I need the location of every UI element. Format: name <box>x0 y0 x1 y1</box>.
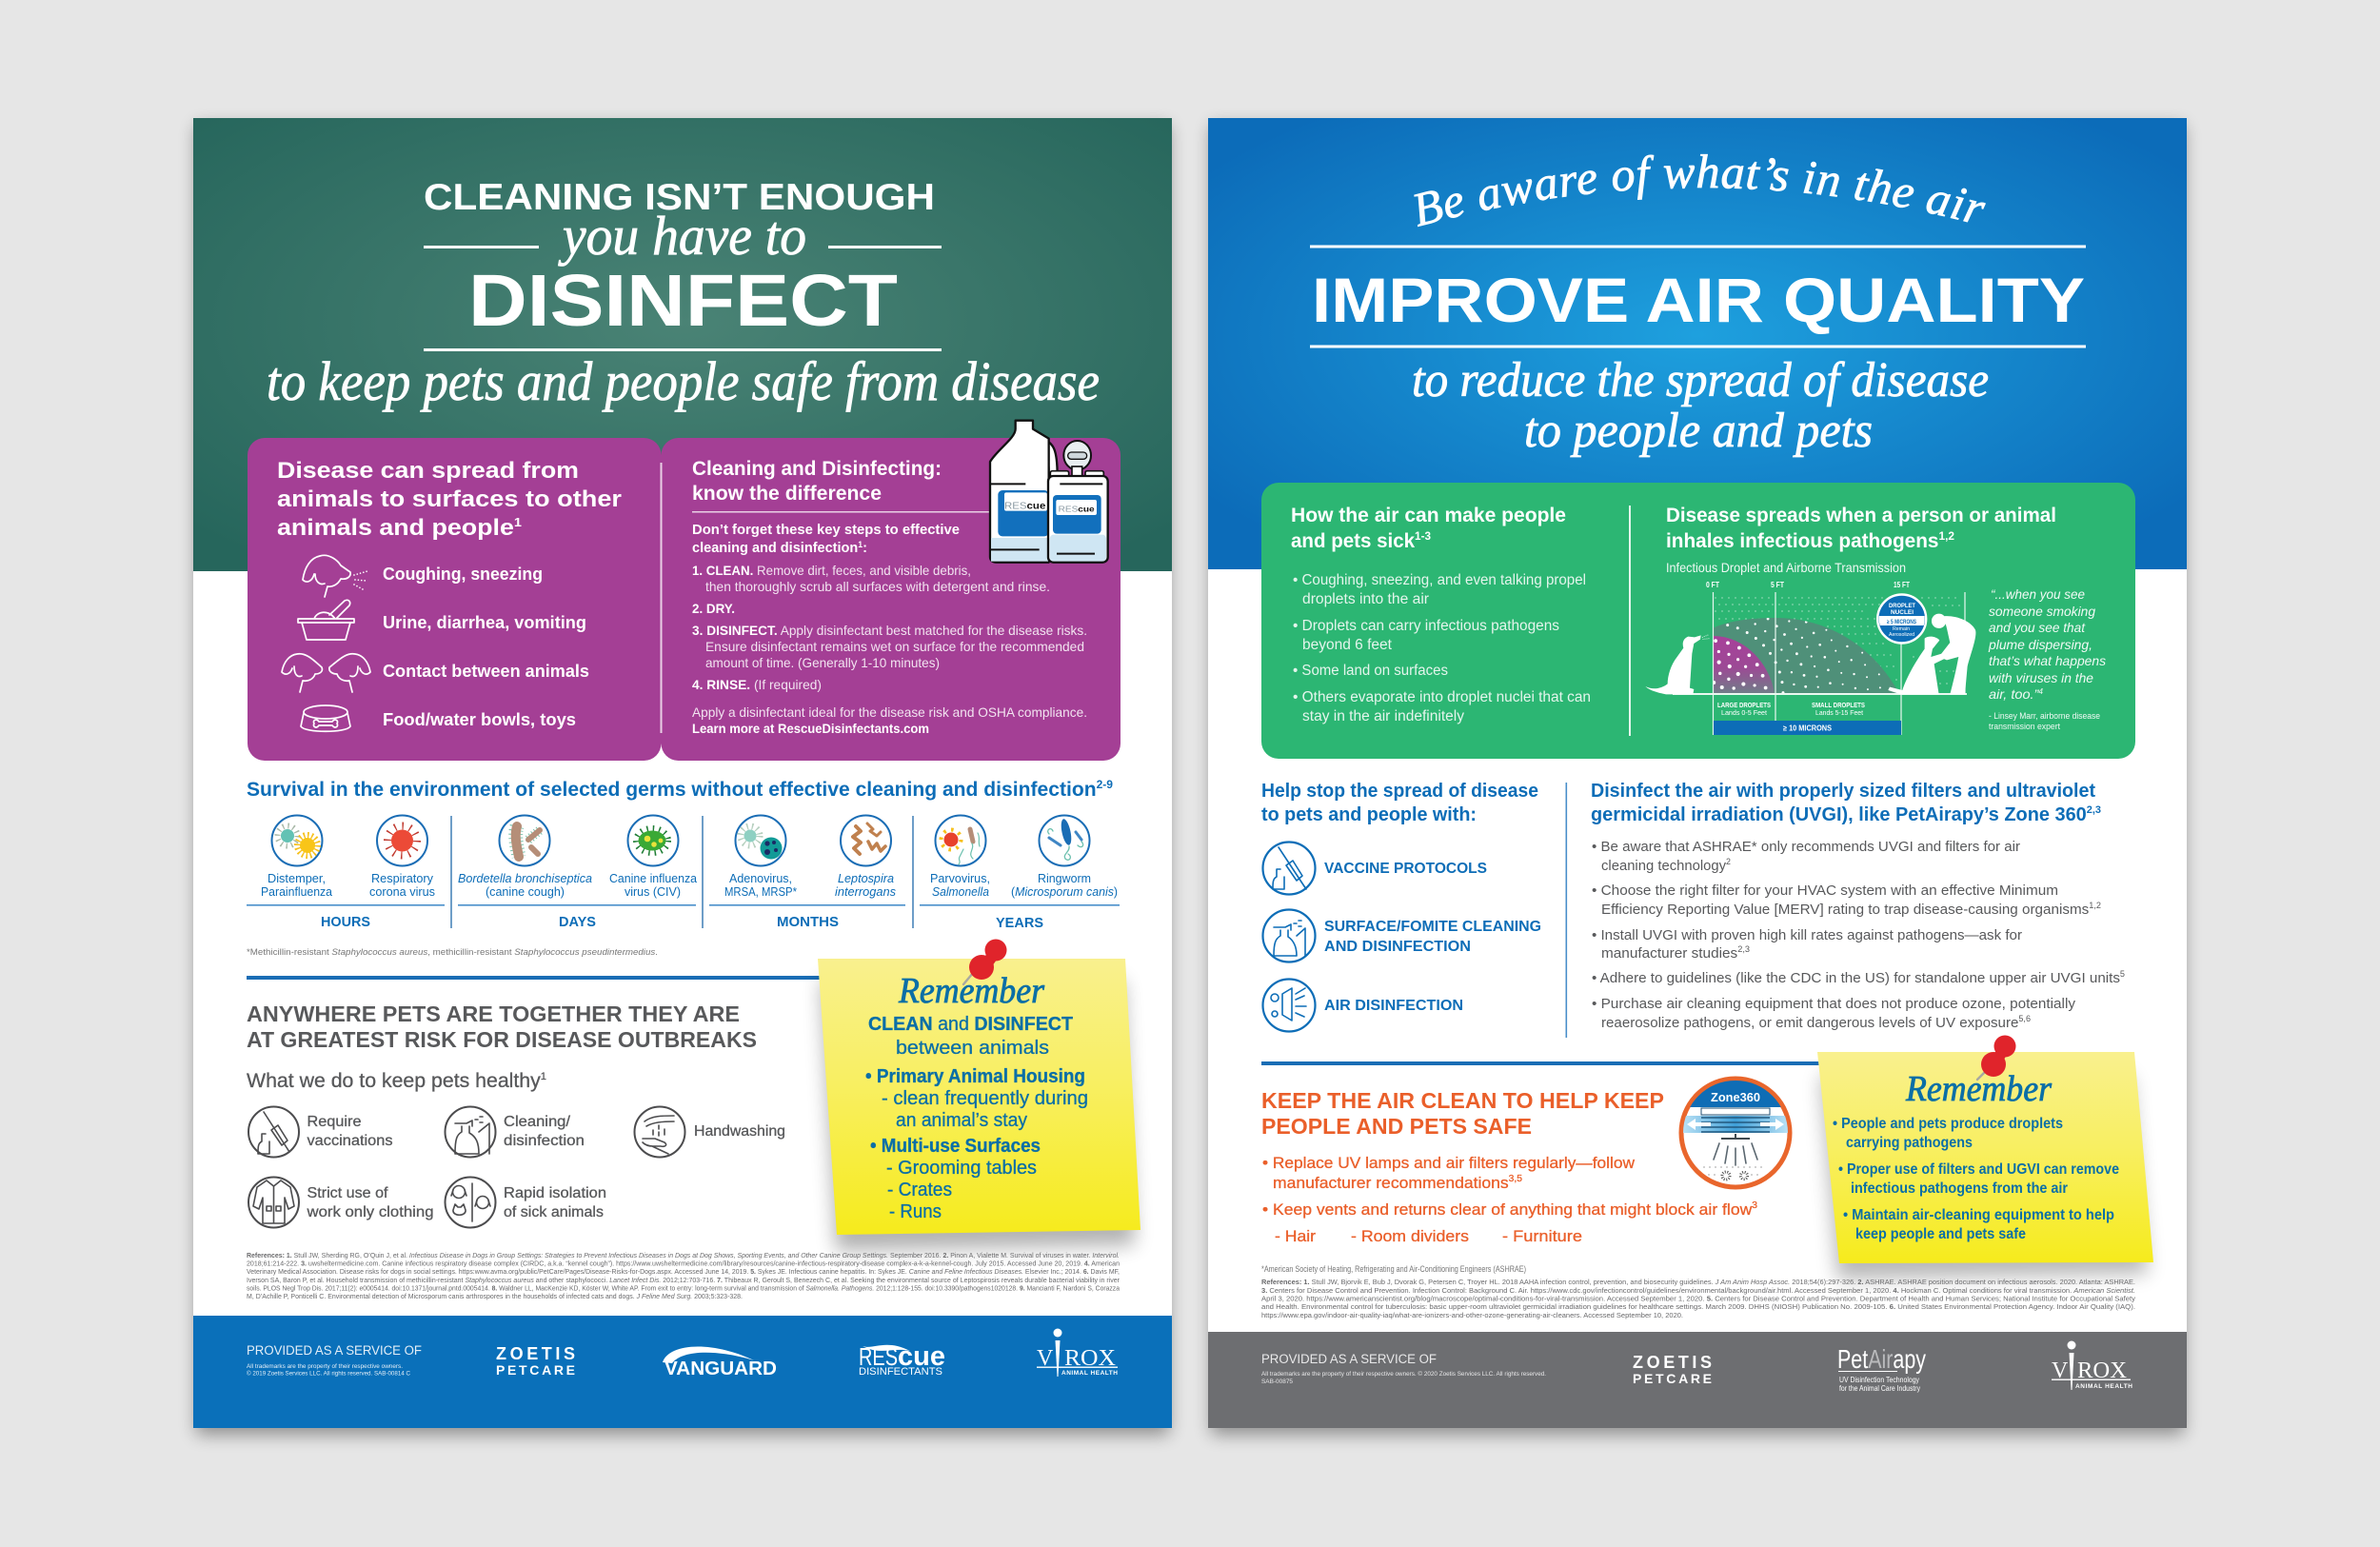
disinfect bullet list: 1,2 <box>2089 901 2101 910</box>
text: cleaning: Cleaning/ <box>504 1114 571 1130</box>
practices list <box>248 1106 785 1228</box>
labels: years germs <box>930 872 1118 899</box>
note text: • Maintain air-cleaning equipment to help <box>1843 1207 2114 1223</box>
disinfect bullet list: • Be aware that ASHRAE* only recommends UVGI and filters for air <box>1592 839 2020 855</box>
provided as a service: PROVIDED AS A SERVICE OF <box>1261 1352 1437 1366</box>
droplet size labels: Lands 5-15 Feet <box>1815 708 1864 717</box>
subheading: what we do: What we do to keep pets healthy <box>247 1070 537 1092</box>
droplet size labels: SMALL DROPLETS <box>1812 701 1865 709</box>
icon: ringworm <box>1040 815 1089 866</box>
references <box>1261 1278 2135 1319</box>
labels: hours germs: corona virus <box>369 885 435 899</box>
poster shadows <box>196 126 2184 1435</box>
text: isolation <box>504 1185 606 1220</box>
icon: adenovirus mrsa <box>735 815 786 866</box>
title <box>1310 154 2086 458</box>
logo: rescue: RES <box>859 1342 898 1371</box>
note text: carrying pathogens <box>1846 1135 1973 1151</box>
steps list <box>692 563 1087 736</box>
steps list: 3. DISINFECT. Apply disinfectant best matched for the disease risks. <box>692 623 1087 638</box>
micron bar: ≥ 10 MICRONS <box>1783 724 1833 733</box>
quote: that’s what happens <box>1989 653 2106 668</box>
text: coughing: Coughing, sneezing <box>383 565 543 584</box>
heading: survival in the environment: Survival in the environment of selected germs without effective cleaning and disinfection <box>247 779 1093 801</box>
icon: cleaning <box>446 1106 495 1158</box>
disinfect bullet list: reaerosolize pathogens, or emit dangerous levels of UV exposure <box>1601 1015 2015 1031</box>
divider rule <box>1261 1061 1828 1065</box>
text: vaccinations: Require <box>307 1114 362 1130</box>
years group <box>920 815 1120 931</box>
steps list: amount of time. (Generally 1-10 minutes) <box>705 655 940 670</box>
note text: infectious pathogens from the air <box>1851 1180 2068 1197</box>
text: isolation: of sick animals <box>504 1204 604 1220</box>
logo: virox <box>2052 1340 2132 1390</box>
steps list: Apply a disinfectant ideal for the disease risk and OSHA compliance. <box>692 704 1087 720</box>
quote: with viruses in the <box>1989 670 2093 685</box>
icon: two dogs <box>282 654 370 692</box>
panel heading: and pets sick <box>1291 530 1418 552</box>
labels: hours germs: Respiratory <box>371 872 434 885</box>
provided as a service: PROVIDED AS A SERVICE OF <box>247 1343 422 1358</box>
icon: coughing dog <box>303 555 367 597</box>
disinfect bullet list: 5,6 <box>2018 1014 2031 1023</box>
icon: isolation <box>446 1177 495 1228</box>
provided as a service <box>1261 1352 1546 1385</box>
bullet list: • Coughing, sneezing, and even talking propel <box>1293 572 1586 588</box>
text: surface: AND DISINFECTION <box>1324 939 1471 955</box>
labels: years germs: Parvovirus, <box>930 872 990 885</box>
title: DISINFECT <box>468 260 898 342</box>
heading: disease spreads <box>1666 505 2056 552</box>
title: you have to <box>558 205 806 267</box>
group dividers <box>451 816 913 928</box>
orange bullet list: - Room dividers <box>1351 1227 1469 1245</box>
icon: respiratory corona virus <box>377 815 427 866</box>
logo: zoetis <box>496 1344 575 1378</box>
steps list: 4. RINSE. (If required) <box>692 677 822 692</box>
quote: someone smoking <box>1989 604 2095 619</box>
bullet list: beyond 6 feet <box>1302 637 1393 653</box>
steps list: 2. DRY. <box>692 601 735 616</box>
steps intro: Don’t forget these key steps to effective <box>692 522 960 538</box>
title: Be aware of what’s in the air <box>1414 154 1986 227</box>
text: handwashing: Handwashing <box>694 1123 785 1140</box>
badge: droplet nuclei: DROPLET <box>1889 603 1915 609</box>
heading: survival in the environment: 2-9 <box>1097 778 1113 791</box>
orange bullet list: - Furniture <box>1502 1227 1582 1245</box>
logo: vanguard <box>663 1347 777 1379</box>
label: hours: HOURS <box>321 914 370 930</box>
heading: disinfect the air: Disinfect the air with properly sized filters and ultraviolet <box>1591 781 2095 802</box>
steps intro: : <box>863 540 867 556</box>
panel heading <box>692 458 990 512</box>
divider rule <box>247 976 827 980</box>
logo: zoetis: ZOETIS <box>496 1344 575 1363</box>
title <box>267 177 1100 412</box>
orange bullet list: manufacturer recommendations <box>1273 1174 1501 1192</box>
provided as a service: All trademarks are the property of their respective owners. © 2020 Zoetis Services LLC. All rights reserved. <box>1261 1370 1546 1378</box>
note text: - clean frequently during <box>882 1088 1088 1109</box>
logo: zoetis: PETCARE <box>1633 1371 1712 1386</box>
provided as a service <box>247 1343 422 1377</box>
heading: disease spreads: inhales infectious pathogens <box>1666 530 1941 552</box>
orange bullet list <box>1262 1154 1757 1245</box>
logo: vanguard: VANGUARD <box>664 1359 777 1379</box>
icon: bordetella <box>499 815 550 866</box>
panel heading: How the air can make people <box>1291 505 1566 526</box>
subheading: transmission: Infectious Droplet and Airborne Transmission <box>1666 560 1906 575</box>
droplet size labels: Lands 0-5 Feet <box>1721 708 1768 717</box>
text: food: Food/water bowls, toys <box>383 710 576 729</box>
badge: droplet nuclei: Aerosolized <box>1889 632 1914 638</box>
droplet size labels <box>1717 701 1865 717</box>
text: vaccinations: vaccinations <box>307 1133 393 1149</box>
title: CLEANING ISN’T ENOUGH <box>424 177 935 218</box>
logo: zoetis: PETCARE <box>496 1362 575 1378</box>
labels: months germs: Adenovirus, <box>729 872 792 885</box>
provided as a service: All trademarks are the property of their respective owners. <box>247 1363 403 1370</box>
note text: CLEAN and DISINFECT <box>868 1014 1073 1035</box>
logo: rescue <box>859 1341 945 1378</box>
note text: • Multi-use Surfaces <box>870 1136 1041 1157</box>
icon: bowl and bone <box>301 705 350 731</box>
icon: vaccine <box>1262 842 1316 895</box>
logo: rescue: DISINFECTANTS <box>859 1366 942 1378</box>
quote: transmission expert <box>1989 722 2060 732</box>
labels: months germs: MRSA, MRSP* <box>724 885 797 899</box>
icon: zone360 unit <box>1680 1076 1791 1187</box>
heading: keep the air clean: KEEP THE AIR CLEAN TO HELP KEEP <box>1261 1088 1664 1113</box>
disinfect bullet list: • Adhere to guidelines (like the CDC in the US) for standalone upper air UVGI units <box>1592 970 2114 986</box>
panel: cleaning and disinfecting <box>661 421 1121 761</box>
disinfect bullet list: 2,3 <box>1737 944 1750 954</box>
quote: plume dispersing, <box>1988 637 2092 652</box>
script: remember: Remember <box>898 971 1044 1011</box>
panel heading: Disease can spread from <box>277 458 579 484</box>
heading: anywhere pets are together: AT GREATEST RISK FOR DISEASE OUTBREAKS <box>247 1027 757 1052</box>
disinfect bullet list: cleaning technology <box>1601 858 1728 874</box>
badge: droplet nuclei: ≥ 5 MICRONS <box>1887 620 1916 625</box>
title: to reduce the spread of disease <box>1412 353 1989 407</box>
logo: virox: ROX <box>2077 1359 2127 1383</box>
panel heading: know the difference <box>692 483 882 505</box>
labels: days germs: Bordetella bronchiseptica <box>458 872 592 885</box>
heading: disinfect the air: germicidal irradiation (UVGI), like PetAirapy’s Zone 360 <box>1591 804 2089 825</box>
note text: between animals <box>896 1038 1049 1059</box>
logo: zoetis <box>1633 1353 1712 1386</box>
chart: droplet transmission <box>1645 582 1976 735</box>
poster: disinfect <box>193 118 1172 1428</box>
orange bullet list: 3,5 <box>1509 1174 1522 1184</box>
header background <box>193 118 1172 571</box>
references <box>247 1251 1121 1300</box>
labels: days germs: (canine cough) <box>486 885 565 899</box>
logo: zoetis: ZOETIS <box>1633 1353 1712 1372</box>
steps list: Ensure disinfectant remains wet on surface for the recommended <box>705 639 1084 654</box>
quote <box>1988 586 2106 732</box>
logo: petairapy <box>1837 1344 1926 1393</box>
disinfect bullet list: • Purchase air cleaning equipment that does not produce ozone, potentially <box>1592 996 2076 1012</box>
text: clothing <box>306 1185 434 1220</box>
labels: days germs <box>458 872 697 899</box>
panel heading <box>1291 505 1566 552</box>
germ survival chart <box>247 815 1120 931</box>
quote: 4 <box>2038 687 2044 696</box>
logo: virox: ROX <box>1064 1346 1116 1371</box>
badge: droplet nuclei: Remain <box>1893 626 1910 632</box>
vertical rule <box>1565 783 1567 1038</box>
text: air: AIR DISINFECTION <box>1324 998 1463 1014</box>
references: 3. Centers for Disease Control and Prevention. Infection Control: Background C. Air. https://www.cdc.gov/infectioncontrol/guidelines/environmental/background/air.html. Accessed September 1, 2020. 4. Hockman C. Optimal conditions for viral transmission. American Scientist. <box>1261 1286 2135 1295</box>
icon: rescue bottles: REScue <box>1059 504 1095 513</box>
labels: hours germs <box>261 872 435 899</box>
note text: • Primary Animal Housing <box>865 1066 1085 1087</box>
hours group <box>247 815 445 930</box>
heading: keep the air clean: PEOPLE AND PETS SAFE <box>1261 1114 1532 1139</box>
bullet list: droplets into the air <box>1302 591 1429 607</box>
heading: disinfect the air: 2,3 <box>2087 804 2101 816</box>
logo: virox: V <box>2052 1359 2069 1383</box>
months group <box>709 815 905 930</box>
steps intro <box>692 522 960 556</box>
title: to keep pets and people safe from disease <box>267 350 1100 412</box>
silhouette: person and dog <box>1888 614 1975 694</box>
bullet list: • Others evaporate into droplet nuclei that can <box>1293 689 1591 705</box>
labels: days germs: Canine influenza <box>609 872 697 885</box>
orange bullet list: • Replace UV lamps and air filters regularly—follow <box>1262 1154 1636 1172</box>
droplet size labels: LARGE DROPLETS <box>1717 701 1771 709</box>
panel heading <box>277 458 622 541</box>
panel heading: 1-3 <box>1415 529 1431 543</box>
labels: years germs: (Microsporum canis) <box>1011 885 1118 899</box>
text: cleaning: disinfection <box>504 1133 585 1149</box>
disinfect bullet list: • Install UVGI with proven high kill rates against pathogens—ask for <box>1592 927 2022 943</box>
quote: air, too.” <box>1989 686 2037 702</box>
logo: virox <box>1037 1329 1118 1377</box>
icon: rescue bottles <box>990 421 1108 563</box>
text: contact: Contact between animals <box>383 662 589 681</box>
label: months: MONTHS <box>777 914 839 930</box>
badge: droplet nuclei: NUCLEI <box>1891 609 1914 616</box>
heading: anywhere pets are together: ANYWHERE PETS ARE TOGETHER THEY ARE <box>247 1002 740 1026</box>
bullet list: • Some land on surfaces <box>1293 663 1448 679</box>
provided as a service: © 2019 Zoetis Services LLC. All rights reserved. SAB-00814 C <box>247 1369 410 1377</box>
footer: grey sponsors <box>1208 1332 2187 1428</box>
note text: keep people and pets safe <box>1855 1226 2026 1242</box>
panel: how disease spreads <box>248 438 661 761</box>
icon: vaccinations <box>248 1106 299 1158</box>
heading: disease spreads: Disease spreads when a person or animal <box>1666 505 2056 526</box>
labels: years germs: Salmonella <box>932 885 989 899</box>
labels: months germs <box>724 872 896 899</box>
text: vaccinations <box>307 1114 393 1149</box>
icon: air disinfection <box>1262 979 1316 1032</box>
references: References: 1. Stull JW, Bjorvik E, Bub J, Dvorak G, Petersen C, Troyer HL. 2018 AAHA infection control, prevention, and biosecurity guidelines. J Am Anim Hosp Assoc. 2018;54(6):297-326. 2. ASHRAE. ASHRAE position document on infectious aerosols. 2020. Atlanta: ASHRAE. <box>1261 1278 2135 1286</box>
icon: leptospira <box>841 815 891 866</box>
plume: large droplets <box>1713 636 1775 694</box>
note text: - Runs <box>889 1201 942 1222</box>
disinfect bullet list: manufacturer studies <box>1601 945 1735 962</box>
steps intro: cleaning and disinfection <box>692 540 863 556</box>
icon: litter tub <box>298 600 354 640</box>
references: https://www.epa.gov/indoor-air-quality-iaq/what-are-ionizers-and-other-ozone-generating-air-cleaners. Accessed September 10, 2020. <box>1261 1311 1683 1319</box>
panel heading: animals to surfaces to other <box>277 486 622 512</box>
steps list: Learn more at RescueDisinfectants.com <box>692 721 929 736</box>
distance labels: 0 FT <box>1706 581 1719 589</box>
icon: distemper <box>272 815 322 866</box>
panel: how air makes people sick <box>1261 483 2135 759</box>
quote: and you see that <box>1989 620 2086 635</box>
logo: virox: V <box>1037 1346 1054 1371</box>
quote: “...when you see <box>1991 586 2085 602</box>
disinfect bullet list: 5 <box>2120 969 2125 979</box>
icon: canine influenza <box>628 815 678 866</box>
micron bar <box>1714 721 1901 735</box>
references: Veterinary Medical Association. Disease risks for dogs in social settings. https:www.avma.org/public/PetCare/Pages/Disease-Risks-for-Dogs.aspx. Accessed June 14, 2019. 5. Sykes JE. Infectious canine hepatitis. In: Sykes JE. Canine and Feline Infectious Diseases. Elsevier Inc.; 2014. 6. Davis MF, <box>247 1267 1120 1276</box>
note text: • Proper use of filters and UGVI can remove <box>1838 1161 2119 1178</box>
text: vaccine: VACCINE PROTOCOLS <box>1324 861 1487 877</box>
references: 2018;61:214-222. 3. uwsheltermedicine.com. Canine infectious respiratory disease complex (CIRDC, a.k.a. “kennel cough”). https://www.uwsheltermedicine.com/library/resources/canine-infectious-respiratory-disease complex-a-k-a-kennel-cough. July 2015. Accessed June 20, 2019. 4. American <box>247 1259 1120 1268</box>
icon: rescue bottles: REScue <box>1004 502 1046 512</box>
subheading: what we do: 1 <box>541 1071 546 1082</box>
references: and Health. Environmental control for tuberculosis: basic upper-room ultraviolet germicidal irradiation guidelines for healthcare settings. March 2009. DHHS (NIOSH) Publication No. 2009-105. 6. United States Environmental Protection Agency. Indoor Air Quality (IAQ). <box>1261 1302 2135 1311</box>
panel heading: animals and people <box>277 515 489 541</box>
sticky note: remember <box>1817 1036 2153 1279</box>
disinfect bullet list: Efficiency Reporting Value [MERV] rating to trap disease-causing organisms <box>1601 902 2081 918</box>
icon: red pin <box>963 939 1007 984</box>
labels: hours germs: Parainfluenza <box>261 885 332 899</box>
disinfect bullet list: • Choose the right filter for your HVAC system with an effective Minimum <box>1592 883 2058 899</box>
labels: months germs: Leptospira <box>838 872 894 885</box>
title: IMPROVE AIR QUALITY <box>1312 265 2085 335</box>
distance labels: 15 FT <box>1894 581 1910 589</box>
note text: - Crates <box>887 1180 952 1200</box>
text: clothing: work only clothing <box>306 1204 434 1220</box>
note text <box>865 1014 1088 1222</box>
distance labels <box>1706 581 1910 589</box>
plume: small droplets <box>1713 618 1899 694</box>
sticky note: remember <box>818 939 1140 1251</box>
distance labels: 5 FT <box>1771 581 1784 589</box>
orange bullet list: - Hair <box>1275 1227 1316 1245</box>
script: remember: Remember <box>1905 1069 2052 1109</box>
silhouette: coughing dog <box>1645 635 1710 694</box>
footer: blue sponsors <box>193 1316 1172 1428</box>
footnote: methicillin: *Methicillin-resistant Staphylococcus aureus , methicillin-resistant Staphylococcus pseudintermedius . <box>247 947 658 958</box>
title: to people and pets <box>1524 404 1873 458</box>
references: M, D’Achille P, Ponticelli C. Environmental detection of Microsporum canis arthrospores in the households of infected cats and dogs. J Feline Med Surg. 2003;5:323-328. <box>247 1292 743 1300</box>
text: isolation: Rapid isolation <box>504 1185 606 1201</box>
note text: • People and pets produce droplets <box>1833 1116 2063 1132</box>
steps list: 1. CLEAN. Remove dirt, feces, and visible debris, <box>692 563 971 578</box>
logo: rescue: cue <box>898 1341 945 1372</box>
label: days: DAYS <box>559 914 596 930</box>
references: soils. PLOS Negl Trop Dis. 2017;11(2): e0005414. doi:10.1371/journal.pntd.0005414. 8. Waldner LL, MacKenzie KD, Köster W, White AP. From exit to entry: long-term survival and transmission of Salmonella. Pathogens. 2012;1:128-155. doi:10.3390/pathogens1020128. 9. Mancianti F, Nardoni S, Corazza <box>247 1283 1121 1293</box>
text: cleaning <box>504 1114 585 1149</box>
heading: help stop the spread: to pets and people with: <box>1261 804 1477 825</box>
bullet list: stay in the air indefinitely <box>1302 708 1464 724</box>
labels: hours germs: Distemper, <box>268 872 326 885</box>
references: Iverson SA, Baron P, et al. Household transmission of methicillin-resistant Staphylococcus aureus and other staphylococci. Lancet Infect Dis. 2012;12:703-716. 7. Thibeaux R, Geroult S, Benezech C, et al. Seeking the environmental source of Leptospirosis reveals durable bacterial viability in river <box>247 1276 1120 1284</box>
logo: petairapy: UV Disinfection Technology <box>1839 1375 1920 1384</box>
icon: red pin <box>1977 1036 2016 1080</box>
poster: air quality <box>1208 118 2187 1428</box>
footnote: ashrae: *American Society of Heating, Refrigerating and Air-Conditioning Engineers (ASHRAE) <box>1261 1264 1526 1275</box>
label: years: YEARS <box>996 915 1043 931</box>
orange bullet list: 3 <box>1752 1200 1757 1211</box>
orange bullet list: • Keep vents and returns clear of anything that might block air flow <box>1262 1200 1736 1219</box>
icon: zone360 unit: Zone360 <box>1711 1090 1760 1104</box>
distance axes <box>1714 592 1965 735</box>
bullet list <box>1293 572 1591 724</box>
heading: disease spreads: 1,2 <box>1938 529 1954 543</box>
logo: petairapy: PetAirapy <box>1837 1344 1926 1374</box>
note text: - Grooming tables <box>886 1158 1037 1179</box>
icon: work clothing <box>248 1177 299 1228</box>
steps list: then thoroughly scrub all surfaces with detergent and rinse. <box>705 579 1050 594</box>
panel heading: 1 <box>514 515 522 529</box>
references: April 3, 2020. https://www.americanscientist.org/blog/macroscope/optimal-conditions-for-viral-transmission. Accessed September 1, 2020. 5. Centers for Disease Control and Prevention. Department of Health and Human Services; National Institute for Occupational Safety <box>1261 1295 2135 1302</box>
labels: days germs: virus (CIV) <box>625 885 681 899</box>
labels: years germs: Ringworm <box>1038 872 1091 885</box>
note text: an animal’s stay <box>896 1110 1027 1131</box>
heading: help stop the spread: Help stop the spread of disease <box>1261 781 1538 802</box>
icon: handwashing <box>634 1106 685 1158</box>
disinfect bullet list: 2 <box>1726 857 1731 866</box>
heading: help stop the spread <box>1261 781 1538 825</box>
days group <box>458 815 697 930</box>
text: clothing: Strict use of <box>307 1185 388 1201</box>
text: surface: SURFACE/FOMITE CLEANING <box>1324 919 1541 935</box>
logo: virox: ANIMAL HEALTH <box>1061 1370 1118 1377</box>
fine droplets <box>1716 598 1961 684</box>
bullet list: • Droplets can carry infectious pathogens <box>1293 618 1559 634</box>
measures list <box>1262 842 1541 1032</box>
logo: petairapy: for the Animal Care Industry <box>1839 1383 1921 1393</box>
provided as a service: SAB-00875 <box>1261 1378 1293 1385</box>
logo: virox: ANIMAL HEALTH <box>2075 1383 2132 1390</box>
labels: months germs: interrogans <box>835 885 896 899</box>
steps intro: 1 <box>858 540 863 549</box>
references: References: 1. Stull JW, Sherding RG, O’Quin J, et al. Infectious Disease in Dogs in Group Settings: Strategies to Prevent Infectious Diseases in Dogs at Dog Shows, Sporting Events, and Other Canine Group Settings. September 2016. 2. Pinon A, Vialette M. Survival of viruses in water. Intervirol. <box>247 1251 1120 1259</box>
text: urine: Urine, diarrhea, vomiting <box>383 613 586 632</box>
badge: droplet nuclei <box>1875 594 1929 644</box>
icon: parvovirus salmonella <box>935 815 986 866</box>
icon: surface cleaning <box>1262 910 1316 962</box>
heading: anywhere pets are together <box>247 1002 757 1052</box>
note text <box>1833 1116 2119 1242</box>
heading: disinfect the air <box>1591 781 2101 825</box>
heading: keep the air clean <box>1261 1088 1664 1139</box>
quote: - Linsey Marr, airborne disease <box>1989 711 2100 722</box>
text: surface <box>1324 919 1541 955</box>
disinfect bullet list <box>1592 839 2125 1031</box>
header background <box>1208 118 2187 569</box>
panel heading: Cleaning and Disinfecting: <box>692 458 942 480</box>
